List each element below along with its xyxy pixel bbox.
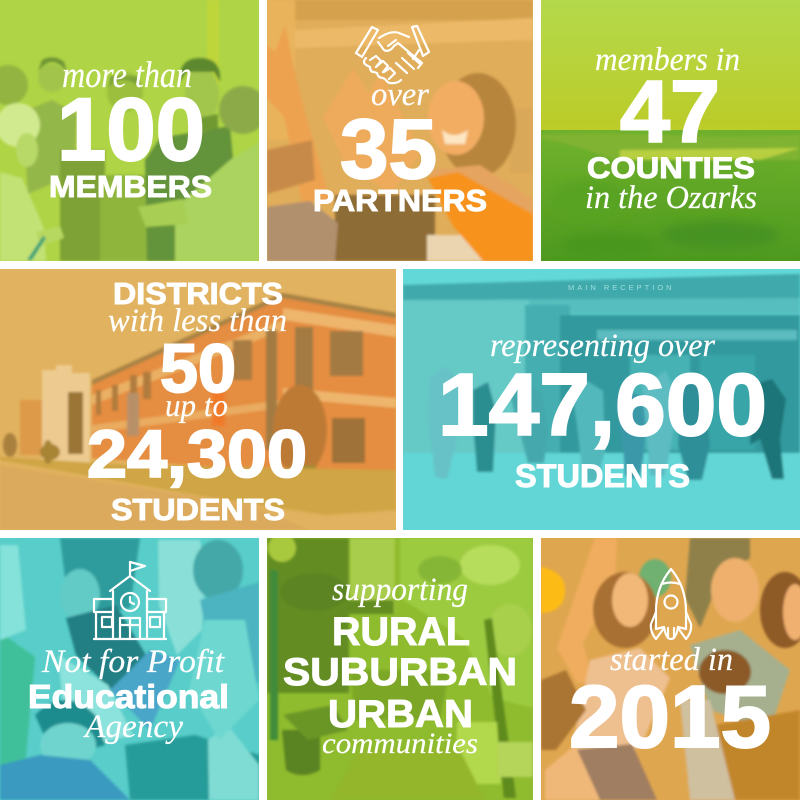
panel: districts — [0, 269, 396, 530]
up to: up to — [165, 387, 228, 423]
more than: more than — [62, 55, 192, 96]
2015: 2015 — [569, 667, 771, 766]
PARTNERS: PARTNERS — [313, 183, 487, 218]
47: 47 — [620, 62, 720, 161]
50: 50 — [160, 330, 236, 407]
started in: started in — [610, 642, 733, 678]
panel: rural suburban urban — [267, 534, 533, 800]
representing over: representing over — [490, 328, 715, 364]
panel: 47 counties — [541, 0, 800, 261]
panel: 100 members — [0, 0, 267, 261]
RURAL: RURAL — [332, 610, 470, 654]
STUDENTS: STUDENTS — [111, 492, 285, 527]
icon: handshake — [356, 26, 429, 83]
supporting: supporting — [332, 572, 468, 608]
icon: rocket — [651, 569, 691, 639]
in the Ozarks: in the Ozarks — [585, 180, 757, 216]
100: 100 — [57, 79, 205, 179]
35: 35 — [340, 102, 437, 196]
main reception sign: MAIN RECEPTION — [568, 283, 675, 292]
Agency: Agency — [83, 709, 183, 745]
members in: members in — [595, 42, 740, 78]
panel: 147,600 students — [403, 269, 800, 530]
over: over — [371, 77, 429, 113]
icon: school — [94, 562, 166, 639]
panel: started in 2015 — [541, 538, 800, 800]
panel: 35 partners — [257, 0, 533, 261]
COUNTIES: COUNTIES — [587, 152, 755, 185]
SUBURBAN: SUBURBAN — [283, 651, 517, 694]
MEMBERS: MEMBERS — [49, 169, 212, 204]
STUDENTS: STUDENTS — [515, 458, 690, 494]
with less than: with less than — [108, 303, 287, 339]
Educational: Educational — [28, 678, 229, 715]
communities: communities — [322, 727, 478, 760]
24,300: 24,300 — [87, 417, 307, 492]
panel: not for profit — [0, 538, 260, 800]
URBAN: URBAN — [328, 693, 473, 736]
Not for Profit: Not for Profit — [41, 644, 225, 680]
DISTRICTS: DISTRICTS — [113, 276, 283, 311]
147,600: 147,600 — [438, 355, 767, 454]
